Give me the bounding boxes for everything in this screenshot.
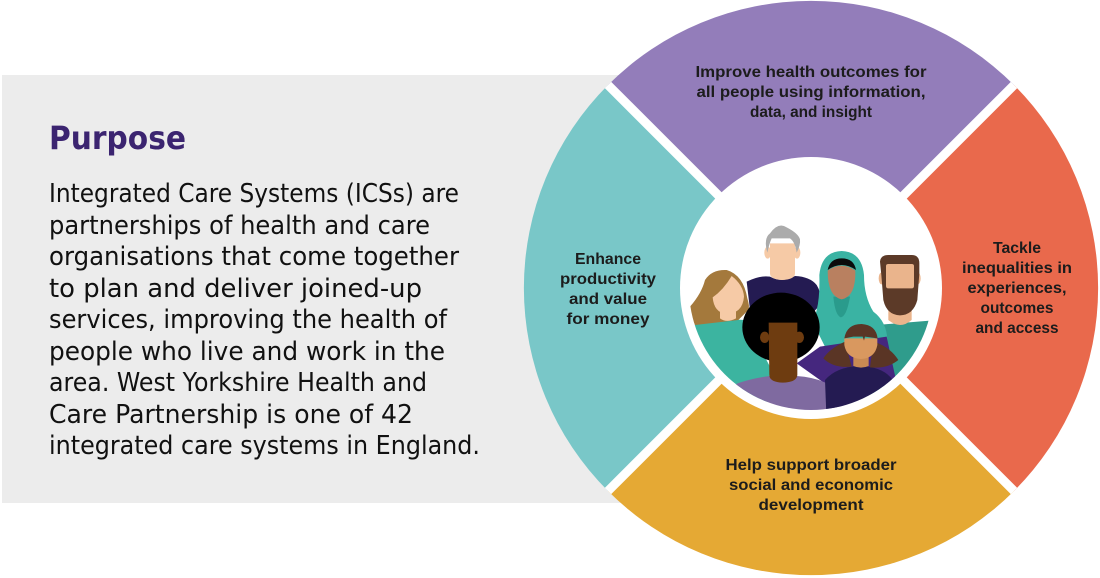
text block: description: to plan and deliver joined-up (49, 274, 422, 304)
person: girl (823, 324, 898, 409)
segment: tackle inequalities: inequalities in (962, 260, 1072, 277)
segment: enhance productivity (524, 85, 811, 491)
text block: description: Integrated Care Systems (ICSs) are (49, 179, 459, 209)
person: older man (746, 226, 820, 311)
text block: description: area. West Yorkshire Health and (49, 368, 427, 398)
person: bearded man (870, 255, 930, 397)
person: person with afro (736, 292, 844, 410)
segment: enhance productivity: and value (569, 291, 647, 308)
text block: description: organisations that come together (49, 242, 459, 272)
illustration: group of people (687, 225, 930, 423)
text block: description: integrated care systems in England. (49, 431, 480, 461)
text block: description: Care Partnership is one of 42 (49, 400, 413, 430)
segment: broader development: social and economic (729, 477, 893, 494)
segment: enhance productivity: productivity (560, 271, 656, 288)
text block: description: partnerships of health and care (49, 211, 430, 241)
chart: purpose wheel (524, 1, 1098, 575)
text block: description (49, 179, 480, 461)
segment: tackle inequalities (811, 85, 1098, 491)
segment: tackle inequalities: and access (976, 320, 1059, 337)
segment: broader development: development (758, 497, 864, 514)
text block: description: people who live and work in the (49, 337, 445, 367)
segment: tackle inequalities: Tackle (993, 240, 1041, 257)
segment: improve health outcomes: data, and insight (750, 104, 873, 121)
person: girl's purple backdrop (797, 336, 896, 387)
segment: tackle inequalities: outcomes (980, 300, 1054, 317)
segment: improve health outcomes: Improve health outcomes for (696, 64, 926, 81)
heading: Purpose: Purpose (49, 119, 186, 157)
segment: enhance productivity: Enhance (575, 251, 641, 268)
segment: improve health outcomes (608, 1, 1014, 288)
segment: enhance productivity: for money (566, 311, 650, 328)
segment: broader development (608, 288, 1014, 575)
text block: description: services, improving the health of (49, 305, 448, 335)
segment: tackle inequalities: experiences, (968, 280, 1066, 297)
segment: broader development: Help support broader (726, 457, 896, 474)
person: woman in hijab (813, 251, 887, 350)
person: woman with long hair (690, 270, 770, 402)
panel: purpose (2, 75, 642, 503)
segment: improve health outcomes: all people using information, (696, 84, 926, 101)
